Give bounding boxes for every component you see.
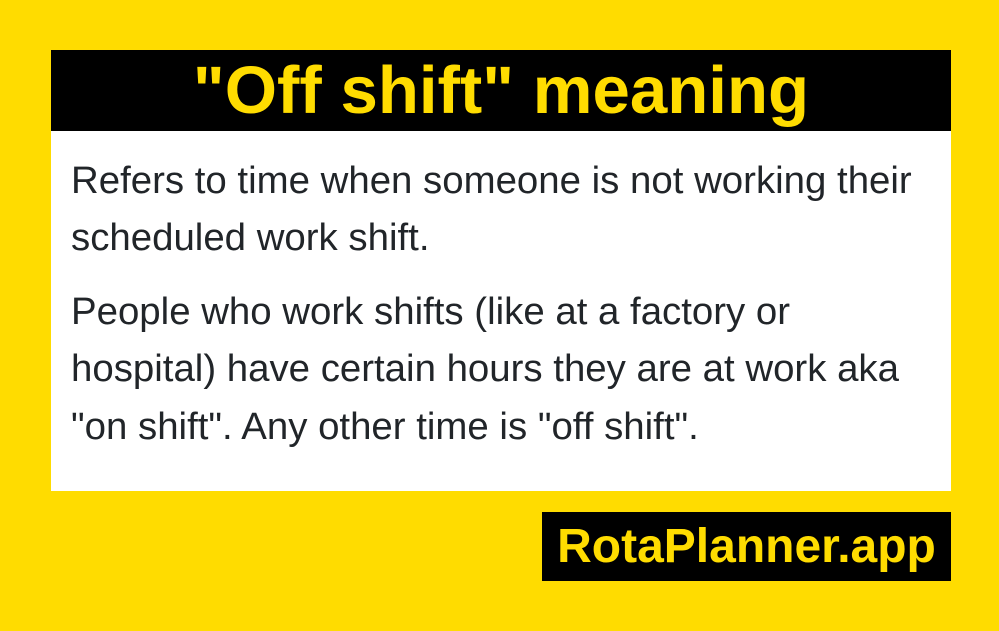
text block: explanation: "on shift". Any other time is "off shift". [71,405,699,448]
text block: definition: scheduled work shift. [71,216,430,259]
text block: definition [71,159,912,259]
brand badge: RotaPlanner.app [557,520,936,573]
title: "Off shift" meaning [193,53,809,128]
panel: white content card [51,131,951,491]
text block: explanation [71,290,899,448]
text block: explanation: People who work shifts (like at a factory or [71,290,790,333]
title [51,50,951,131]
text block: explanation: hospital) have certain hours they are at work aka [71,347,899,390]
text block: definition: Refers to time when someone is not working their [71,159,912,202]
